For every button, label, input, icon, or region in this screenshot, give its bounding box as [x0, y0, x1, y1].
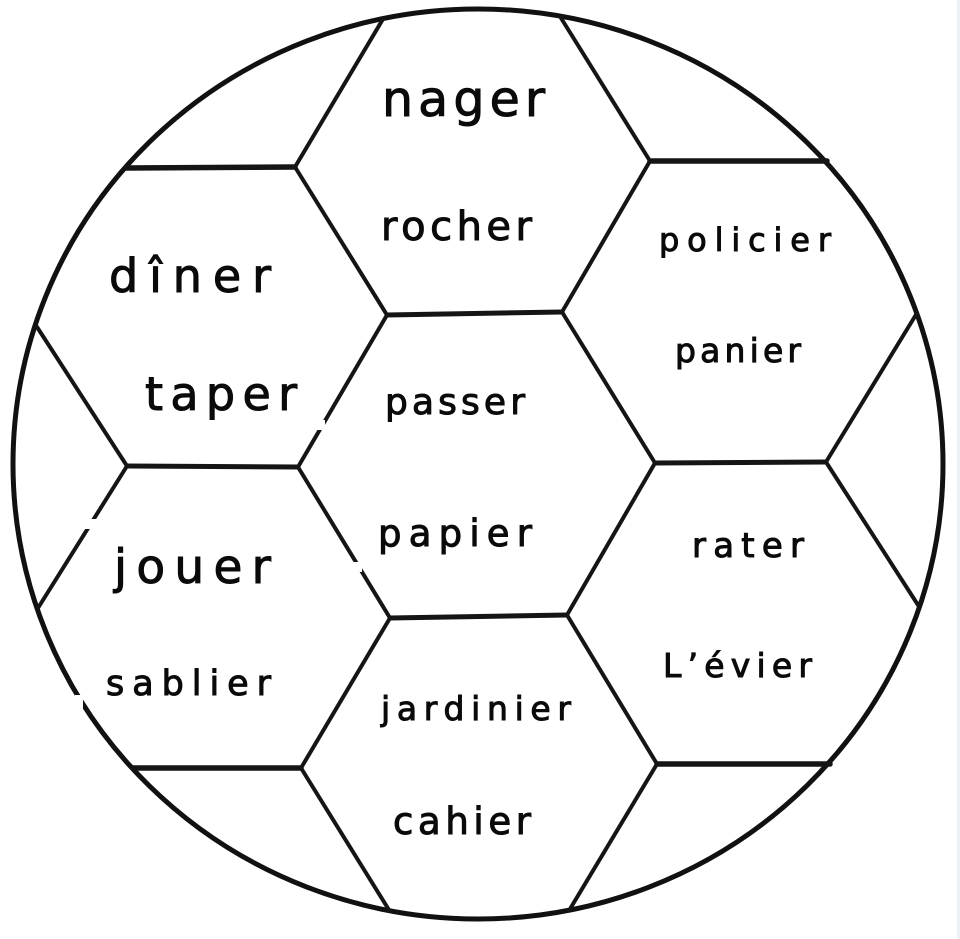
words: center hexagon [378, 382, 533, 555]
word: cahier: cahier [393, 800, 532, 843]
word: sablier: sablier [106, 664, 272, 704]
words: top hexagon [381, 71, 546, 250]
word: L’évier: L’évier [663, 646, 812, 685]
word: nager: nager [382, 71, 546, 128]
words: right upper hexagon [659, 221, 832, 370]
word: jouer: jouer [113, 540, 272, 595]
word: jardinier: jardinier [380, 689, 571, 728]
word: passer: passer [385, 382, 525, 423]
word: rater: rater [692, 526, 804, 566]
word: taper: taper [145, 367, 297, 421]
words: bottom hexagon [380, 689, 571, 843]
word: rocher: rocher [381, 204, 533, 250]
word: panier: panier [675, 331, 801, 370]
words: left upper hexagon [109, 249, 297, 421]
words: right lower hexagon [663, 526, 812, 685]
words: left lower hexagon [106, 540, 272, 704]
word: dîner: dîner [109, 249, 271, 303]
word: policier: policier [659, 221, 832, 259]
word: papier: papier [378, 512, 533, 555]
